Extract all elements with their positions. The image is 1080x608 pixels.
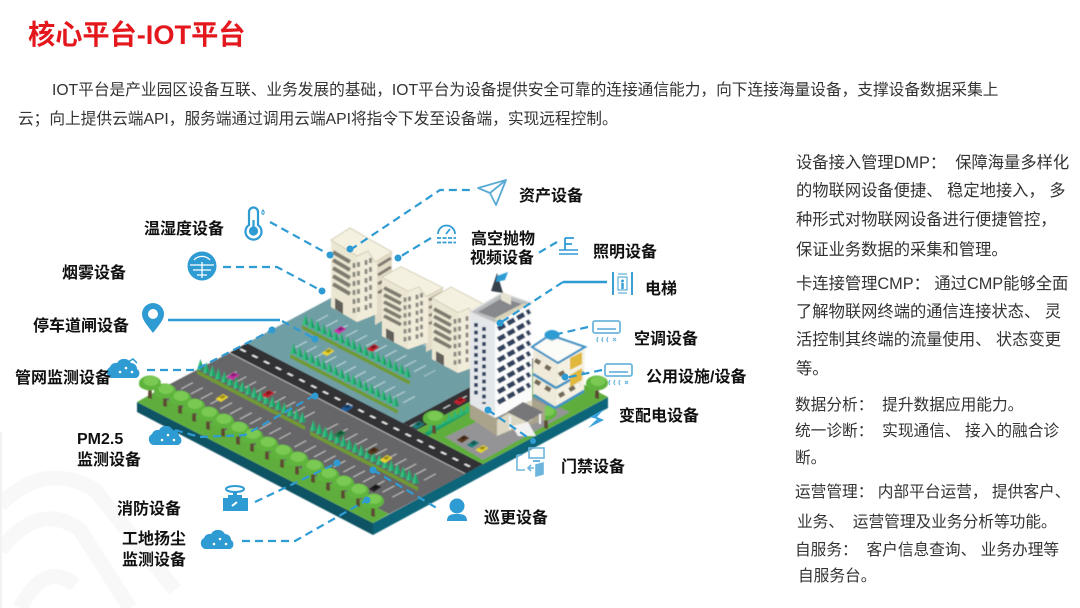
icon: patrol person xyxy=(447,498,467,521)
device labels: 门禁设备 xyxy=(561,457,625,476)
tall tower xyxy=(470,272,545,436)
parking lot gray xyxy=(153,353,465,514)
device labels: 变配电设备 xyxy=(619,406,699,425)
text: data analysis: 数据分析： 提升数据应用能力。 xyxy=(795,397,1023,414)
device labels: 空调设备 xyxy=(634,329,698,348)
trees along verge xyxy=(139,376,608,517)
device labels: 高空抛物 xyxy=(471,229,535,248)
right corner lawn xyxy=(417,363,608,464)
office building 3 xyxy=(432,287,493,376)
icon: location pin xyxy=(142,303,164,333)
icon: air conditioner xyxy=(593,321,620,342)
device labels: 管网监测设备 xyxy=(15,368,111,387)
isometric park platform xyxy=(137,228,608,535)
text: device access management: 种形式对物联网设备进行便捷管控， xyxy=(796,211,1057,229)
text: device access management: 保证业务数据的采集和管理。 xyxy=(796,241,1008,259)
icon: pipe network cloud xyxy=(107,359,139,378)
text: data analysis: 统一诊断： 实现通信、 接入的融合诊 xyxy=(795,423,1059,440)
low-rise building xyxy=(532,330,585,408)
icon: paper plane xyxy=(478,180,506,205)
intro paragraph: IOT平台是产业园区设备互联、业务发展的基础，IOT平台为设备提供安全可靠的连接通信能力，向下连接海量设备，支撑设备数据采集上 xyxy=(52,82,998,99)
text: card connection management: 等。 xyxy=(796,360,829,378)
icon: door access xyxy=(517,448,544,476)
device labels: PM2.5 xyxy=(77,431,123,448)
office building 1 xyxy=(331,228,392,325)
intro paragraph: 云；向上提供云端API，服务端通过调用云端API将指令下发至设备端，实现远程控制。 xyxy=(18,111,618,128)
title: 核心平台-IOT平台 xyxy=(28,19,246,50)
icon: elevator xyxy=(613,272,632,295)
intro paragraph xyxy=(18,81,998,128)
device labels xyxy=(15,186,746,569)
text: operations management: 自服务： 客户信息查询、 业务办理等 xyxy=(795,542,1059,559)
device labels: 电梯 xyxy=(645,280,677,298)
icon: smoke detector xyxy=(188,252,216,280)
icon: dust cloud xyxy=(201,530,233,549)
text: card connection management xyxy=(796,274,1068,378)
text: device access management: 的物联网设备便捷、 稳定地接入， 多 xyxy=(796,182,1066,200)
device labels: 资产设备 xyxy=(519,186,583,205)
device labels: 烟雾设备 xyxy=(62,263,126,282)
text: device access management xyxy=(796,154,1069,259)
icon: lightning xyxy=(588,409,604,428)
device labels: 工地扬尘 xyxy=(122,530,186,548)
device labels: 停车道闸设备 xyxy=(33,316,129,335)
device labels: 消防设备 xyxy=(117,499,181,518)
connector lines xyxy=(147,190,607,541)
icon: fire valve xyxy=(223,486,248,511)
teal upper lot xyxy=(247,276,528,423)
text: data analysis xyxy=(795,396,1059,467)
text: card connection management: 了解物联网终端的通信连接状态、 灵 xyxy=(796,303,1061,321)
text: operations management: 自服务台。 xyxy=(798,568,876,585)
icon: pm2.5 cloud xyxy=(149,426,181,445)
cars xyxy=(216,326,488,492)
side road xyxy=(403,356,542,430)
device labels: 巡更设备 xyxy=(484,508,548,527)
text: operations management: 业务、 运营管理及业务分析等功能。 xyxy=(797,514,1057,531)
text: device access management: 设备接入管理DMP： 保障海量多样化 xyxy=(796,154,1069,172)
office building 2 xyxy=(382,267,443,352)
device labels: 监测设备 xyxy=(77,450,141,469)
icon: thermometer xyxy=(245,208,264,240)
platform sides xyxy=(137,402,373,535)
text: data analysis: 断。 xyxy=(795,450,826,467)
green verge xyxy=(137,393,389,523)
main road xyxy=(229,343,483,474)
text: card connection management: 卡连接管理CMP： 通过CMP能够全面 xyxy=(796,275,1068,293)
markings drawn in platform coordinates xyxy=(177,276,608,502)
device labels: 视频设备 xyxy=(470,248,534,267)
right description column xyxy=(795,154,1070,585)
icon: gauge xyxy=(437,226,456,242)
text: operations management xyxy=(795,483,1070,585)
watermark logo xyxy=(0,432,2,608)
device labels: 照明设备 xyxy=(593,242,657,261)
text: card connection management: 活控制其终端的流量使用、 状态变更 xyxy=(796,331,1061,349)
text: operations management: 运营管理： 内部平台运营， 提供客户、 xyxy=(795,484,1070,501)
device labels: 温湿度设备 xyxy=(144,219,224,238)
icon: public facility xyxy=(605,364,632,385)
device labels: 公用设施/设备 xyxy=(646,367,746,386)
hedges xyxy=(197,314,470,491)
icon: lighting xyxy=(559,238,578,254)
device labels: 监测设备 xyxy=(122,550,186,569)
